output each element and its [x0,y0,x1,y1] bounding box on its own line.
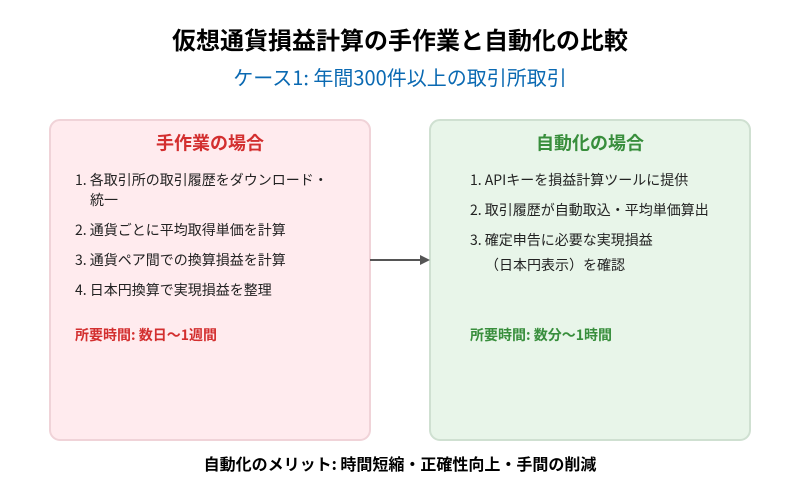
manual steps: 2. 通貨ごとに平均取得単価を計算 [75,220,286,240]
manual time required: 所要時間: 数日〜1週間 [75,325,217,345]
automated time required: 所要時間: 数分〜1時間 [470,325,612,345]
manual steps: 4. 日本円換算で実現損益を整理 [75,280,272,300]
manual steps [75,170,328,300]
automated steps: 3. 確定申告に必要な実現損益 [470,230,653,250]
manual steps: 1. 各取引所の取引履歴をダウンロード・ [75,170,328,190]
panel: manual [50,120,370,440]
manual steps: 3. 通貨ペア間での換算損益を計算 [75,250,286,270]
subtitle: ケース1: 年間300件以上の取引所取引 [233,62,567,91]
automated panel background [430,120,750,440]
automated steps: 1. APIキーを損益計算ツールに提供 [470,170,688,190]
panel: automated [430,120,750,440]
manual heading: 手作業の場合 [156,130,264,156]
automated steps [470,170,709,275]
manual steps: 統一 [90,190,118,210]
manual panel background [50,120,370,440]
arrow [370,255,430,265]
automated heading: 自動化の場合 [536,130,644,156]
automated steps: （日本円表示）を確認 [485,255,625,275]
title: 仮想通貨損益計算の手作業と自動化の比較 [172,21,628,56]
automated steps: 2. 取引履歴が自動取込・平均単価算出 [470,200,709,220]
footer benefit: 自動化のメリット: 時間短縮・正確性向上・手間の削減 [204,451,596,475]
